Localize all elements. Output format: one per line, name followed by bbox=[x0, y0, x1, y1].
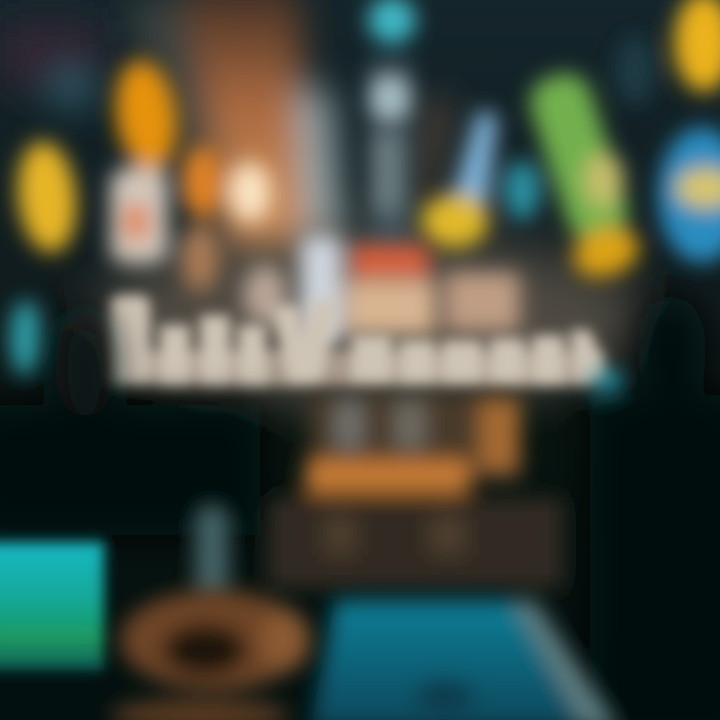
sign: yellow oval bbox=[12, 138, 82, 256]
band of blurred lettering bbox=[110, 295, 612, 387]
shopfront bbox=[300, 235, 520, 345]
roof: red orange bbox=[350, 245, 430, 277]
lamp: white glow bbox=[229, 162, 271, 222]
centre column with lights bbox=[368, 0, 416, 250]
teal accent at end of lettering bbox=[592, 370, 628, 402]
ceiling: warm wood perspective bbox=[125, 0, 455, 250]
screen: teal green bottom left bbox=[0, 542, 104, 670]
sign: blue tall bbox=[452, 110, 498, 205]
sign: orange glow bbox=[181, 146, 225, 218]
sign: yellow top right bbox=[674, 0, 720, 92]
sign: yellow bbox=[566, 219, 646, 285]
warm haze behind lettering bbox=[90, 235, 650, 405]
counter bbox=[268, 395, 563, 588]
top left dark storefront tint bbox=[0, 20, 100, 110]
sign: white panel bbox=[110, 168, 168, 264]
floor: teal bbox=[310, 600, 620, 720]
sign: teal small bbox=[10, 300, 42, 376]
counter base bbox=[268, 498, 563, 588]
sign: green tilted bbox=[523, 67, 635, 247]
sign: teal bbox=[503, 160, 541, 220]
left and right silhouettes bbox=[0, 295, 720, 720]
figure: grey teal bbox=[195, 505, 229, 600]
right signs bbox=[421, 0, 720, 285]
sign: orange yellow bbox=[108, 56, 184, 176]
sign: yellow blob bbox=[421, 194, 489, 248]
bowl: brown shape bottom bbox=[110, 590, 310, 720]
floor: light diagonal bbox=[512, 600, 620, 720]
sign: blue yellow disc bbox=[658, 127, 720, 263]
counter sign: orange bbox=[305, 460, 470, 494]
left signs bbox=[10, 56, 287, 376]
